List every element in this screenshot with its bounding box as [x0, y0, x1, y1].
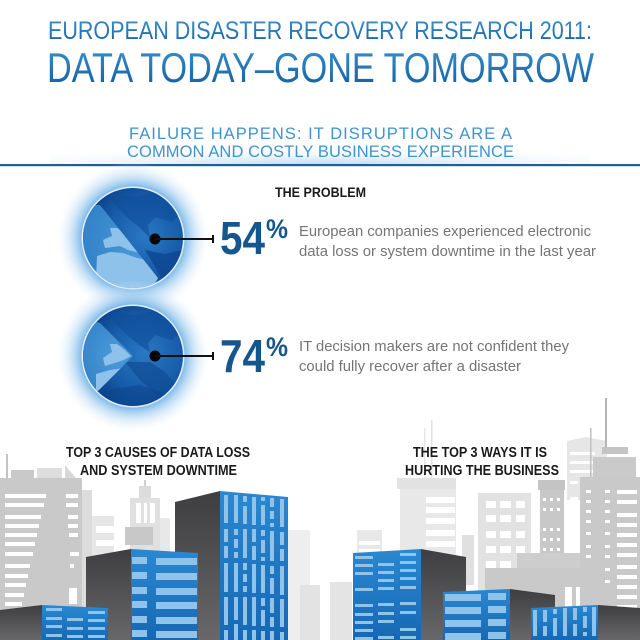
description 74 percent: IT decision makers are not confident they [299, 339, 570, 355]
medium blue building left [86, 549, 198, 640]
globe two [62, 283, 204, 428]
stat 54 percent: % [266, 214, 288, 244]
globe one pointer [150, 234, 214, 244]
heading: top 3 ways: THE TOP 3 WAYS IT IS [413, 445, 547, 461]
small blue building right [531, 605, 640, 640]
small blue building left [0, 605, 108, 640]
heading: top 3 causes: AND SYSTEM DOWNTIME [80, 463, 237, 479]
description 54 percent: data loss or system downtime in the last year [299, 244, 596, 260]
stat 74 percent: % [266, 332, 288, 362]
heading: the problem: THE PROBLEM [275, 185, 366, 200]
medium blue building right [443, 589, 555, 640]
description 74 percent [299, 339, 570, 375]
large blue building right [353, 549, 466, 640]
header rule [0, 164, 640, 166]
globe two pointer [150, 350, 214, 362]
globe one [62, 164, 204, 302]
heading: top 3 causes [66, 445, 250, 479]
description 74 percent: could fully recover after a disaster [299, 359, 521, 375]
subtitle: COMMON AND COSTLY BUSINESS EXPERIENCE [127, 143, 514, 161]
gray skyline right [330, 398, 640, 640]
subtitle: FAILURE HAPPENS: IT DISRUPTIONS ARE A [129, 125, 512, 143]
description 54 percent: European companies experienced electronic [299, 224, 591, 240]
heading: top 3 ways [405, 445, 559, 479]
heading: top 3 ways: HURTING THE BUSINESS [405, 463, 559, 479]
heading: top 3 causes: TOP 3 CAUSES OF DATA LOSS [66, 445, 250, 461]
stat 54 percent: 54 [220, 212, 265, 264]
tall blue building [175, 491, 288, 640]
subtitle [127, 125, 514, 161]
stat 74 percent: 74 [220, 330, 265, 382]
gray skyline left [0, 454, 320, 640]
header glow [50, 140, 590, 165]
description 54 percent [299, 224, 596, 260]
